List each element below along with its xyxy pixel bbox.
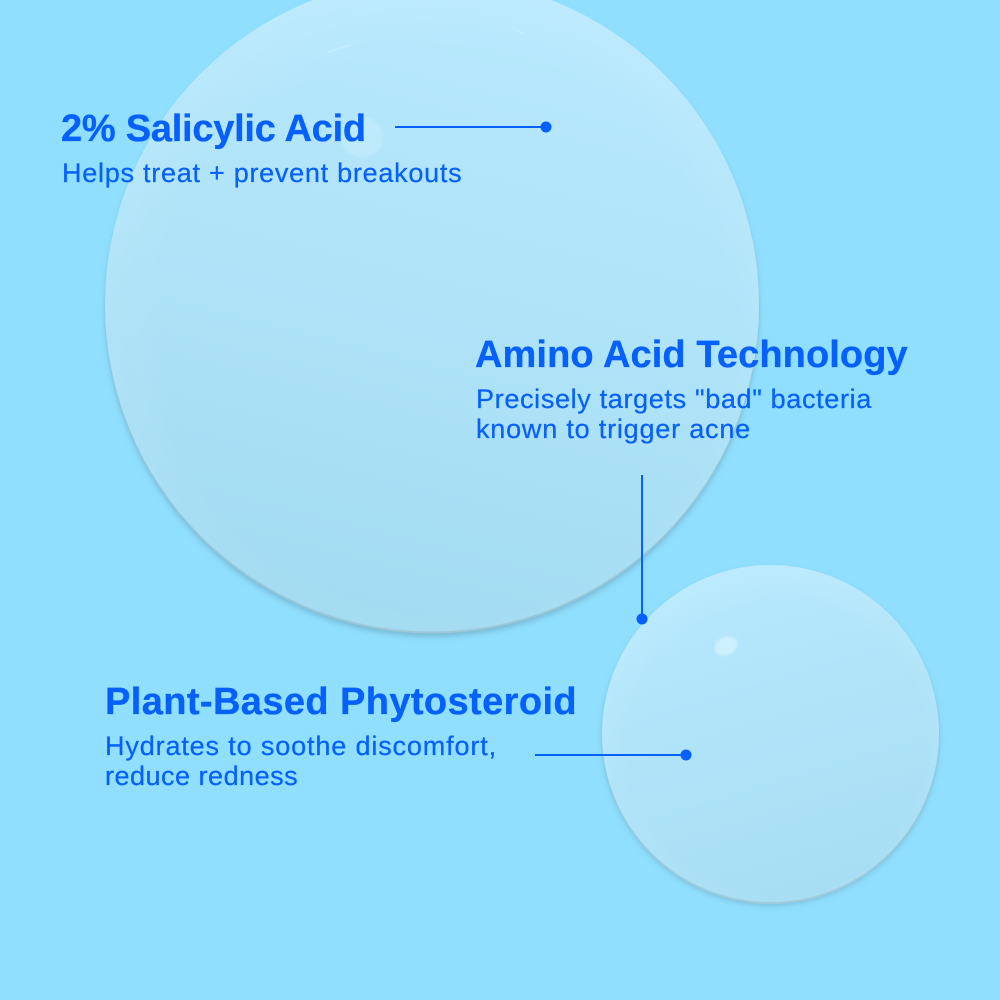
leader line: amino acid [636, 475, 648, 624]
description: known to trigger acne [476, 414, 751, 444]
leader line: phytosteroid [535, 750, 692, 760]
leader line: salicylic acid [395, 122, 552, 132]
callout: amino acid technology [475, 334, 908, 444]
large droplet [105, 0, 759, 636]
heading: Amino Acid Technology [475, 334, 908, 376]
callout: salicylic acid [61, 108, 462, 188]
description: Helps treat + prevent breakouts [62, 158, 462, 188]
small droplet [602, 565, 939, 904]
heading: Plant-Based Phytosteroid [105, 681, 577, 723]
description: Precisely targets "bad" bacteria [476, 384, 872, 414]
description: reduce redness [105, 761, 298, 791]
heading: 2% Salicylic Acid [61, 108, 366, 150]
callout: plant-based phytosteroid [105, 681, 577, 791]
description: Hydrates to soothe discomfort, [105, 731, 497, 761]
description [476, 384, 872, 444]
description [105, 731, 497, 791]
